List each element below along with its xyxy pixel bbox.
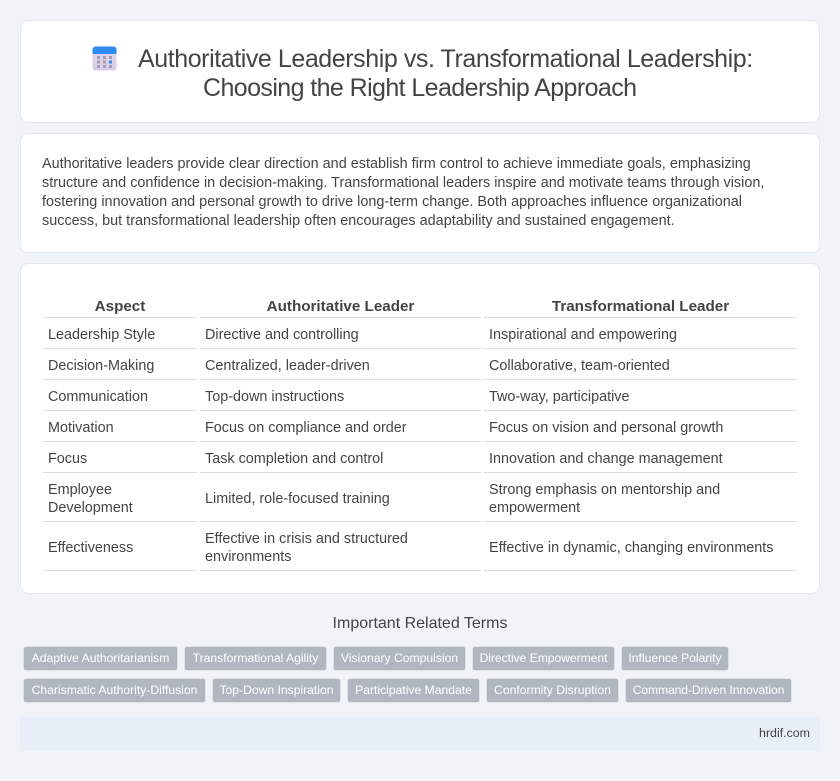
row: Leadership Style: Inspirational and empowering <box>489 327 677 343</box>
row: Employee Development: Limited, role-focused training <box>205 491 390 507</box>
heading: related terms: Important Related Terms <box>333 615 507 632</box>
tag <box>212 678 341 703</box>
tag <box>347 678 480 703</box>
tag <box>621 646 729 671</box>
text block: introduction: success, but transformational leadership often encourages adaptability and sustained engagement. <box>42 213 675 229</box>
tag: Command-Driven Innovation <box>633 683 784 697</box>
text block: introduction: Authoritative leaders provide clear direction and establish firm control to achieve immediate goals, emphasizing <box>42 156 751 172</box>
row: Employee Development <box>48 482 720 516</box>
tag: Participative Mandate <box>355 683 472 697</box>
text block: introduction: structure and confidence in decision-making. Transformational leaders inspire and motivate teams through vision, <box>42 175 764 191</box>
row: Leadership Style <box>48 327 677 343</box>
row: Employee Development: empowerment <box>489 500 580 516</box>
row: Employee Development: Strong emphasis on mentorship and <box>489 482 720 498</box>
text block: introduction: fostering innovation and personal growth to drive long-term change. Both approaches influence organizational <box>42 194 742 210</box>
row: Leadership Style: Directive and controlling <box>205 327 359 343</box>
row: Motivation: Focus on vision and personal growth <box>489 420 723 436</box>
tag <box>184 646 327 671</box>
panel: header <box>20 20 820 123</box>
row: Focus <box>48 451 723 467</box>
row: Decision-Making <box>48 358 670 374</box>
row: Focus: Innovation and change management <box>489 451 723 467</box>
icon: calendar <box>92 46 116 70</box>
row: Motivation: Motivation <box>48 420 114 436</box>
tag: Influence Polarity <box>628 651 722 665</box>
row: Focus: Focus <box>48 451 87 467</box>
row: Employee Development: Development <box>48 500 133 516</box>
tag: Conformity Disruption <box>494 683 611 697</box>
panel: comparison table <box>20 263 820 594</box>
tag <box>625 678 792 703</box>
row: Leadership Style: Leadership Style <box>48 327 155 343</box>
row: Decision-Making: Decision-Making <box>48 358 154 374</box>
tag: Transformational Agility <box>193 651 318 665</box>
tag <box>23 678 206 703</box>
tag list: related terms <box>23 646 792 703</box>
row: Focus: Task completion and control <box>205 451 383 467</box>
row: Decision-Making: Collaborative, team-oriented <box>489 358 670 374</box>
row: Communication <box>48 389 630 405</box>
row: Effectiveness <box>48 531 774 565</box>
footer bar <box>20 717 820 751</box>
row: Effectiveness: Effectiveness <box>48 540 133 556</box>
row: Decision-Making: Centralized, leader-driven <box>205 358 370 374</box>
tag <box>486 678 619 703</box>
row: Communication: Top-down instructions <box>205 389 344 405</box>
row: Motivation <box>48 420 723 436</box>
tag: Adaptive Authoritarianism <box>32 651 169 665</box>
footer source: hrdif.com <box>759 726 810 740</box>
row: Motivation: Focus on compliance and order <box>205 420 407 436</box>
table header row: Aspect <box>95 298 145 315</box>
comparison table <box>43 298 797 571</box>
tag: Directive Empowerment <box>480 651 607 665</box>
tag: Visionary Compulsion <box>341 651 458 665</box>
table header row: Transformational Leader <box>552 298 729 315</box>
title: Choosing the Right Leadership Approach <box>203 74 636 102</box>
text block: introduction <box>42 156 764 229</box>
row: Employee Development: Employee <box>48 482 112 498</box>
tag: Charismatic Authority-Diffusion <box>32 683 197 697</box>
tag: Top-Down Inspiration <box>219 683 334 697</box>
title: Authoritative Leadership vs. Transformational Leadership: <box>138 45 753 73</box>
row: Effectiveness: Effective in dynamic, changing environments <box>489 540 774 556</box>
title <box>138 45 753 102</box>
tag <box>23 646 178 671</box>
row: Effectiveness: environments <box>205 549 291 565</box>
table header row: Authoritative Leader <box>267 298 414 315</box>
panel: introduction <box>20 133 820 253</box>
tag <box>333 646 466 671</box>
row: Effectiveness: Effective in crisis and structured <box>205 531 408 547</box>
tag <box>472 646 615 671</box>
table header row <box>95 298 729 315</box>
row: Communication: Two-way, participative <box>489 389 630 405</box>
row: Communication: Communication <box>48 389 148 405</box>
